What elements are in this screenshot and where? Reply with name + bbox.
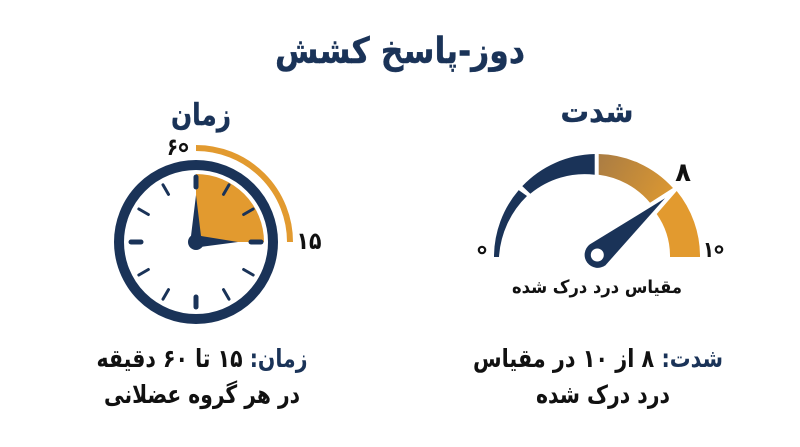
title: دوز-پاسخ کشش — [275, 31, 525, 72]
heading: duration: زمان — [171, 98, 231, 133]
text block: duration — [97, 344, 308, 410]
orange 15 minute sector — [196, 174, 264, 242]
label: 8: ۸ — [675, 158, 691, 188]
gauge segment 1 — [494, 190, 527, 257]
label: 60: ۶۰ — [167, 133, 189, 161]
needle hub — [591, 248, 604, 262]
text block: intensity: درد درک شده — [536, 380, 670, 409]
clock ticks — [131, 177, 261, 307]
text block: duration: زمان: ۱۵ تا ۶۰ دقیقه — [97, 344, 308, 373]
clock hands — [191, 195, 238, 247]
clock illustration — [119, 165, 273, 319]
heading: intensity: شدت — [560, 95, 634, 130]
gauge segment 4 — [657, 191, 700, 257]
clock hub — [188, 234, 204, 250]
duration range arc — [196, 148, 290, 242]
gauge segment 3 — [599, 154, 673, 203]
gauge needle — [585, 198, 665, 268]
text block: intensity — [473, 344, 723, 409]
clock ring — [119, 165, 273, 319]
label: 15: ۱۵ — [296, 227, 322, 255]
gauge segment 2 — [522, 154, 595, 194]
label: 0: ۰ — [476, 238, 488, 262]
text block: intensity: شدت: ۸ از ۱۰ در مقیاس — [473, 344, 723, 373]
intensity gauge — [494, 154, 700, 268]
text block: duration: در هر گروه عضلانی — [104, 380, 300, 410]
label: 10: ۱۰ — [703, 238, 725, 263]
gauge caption: مقیاس درد درک شده — [512, 277, 682, 298]
